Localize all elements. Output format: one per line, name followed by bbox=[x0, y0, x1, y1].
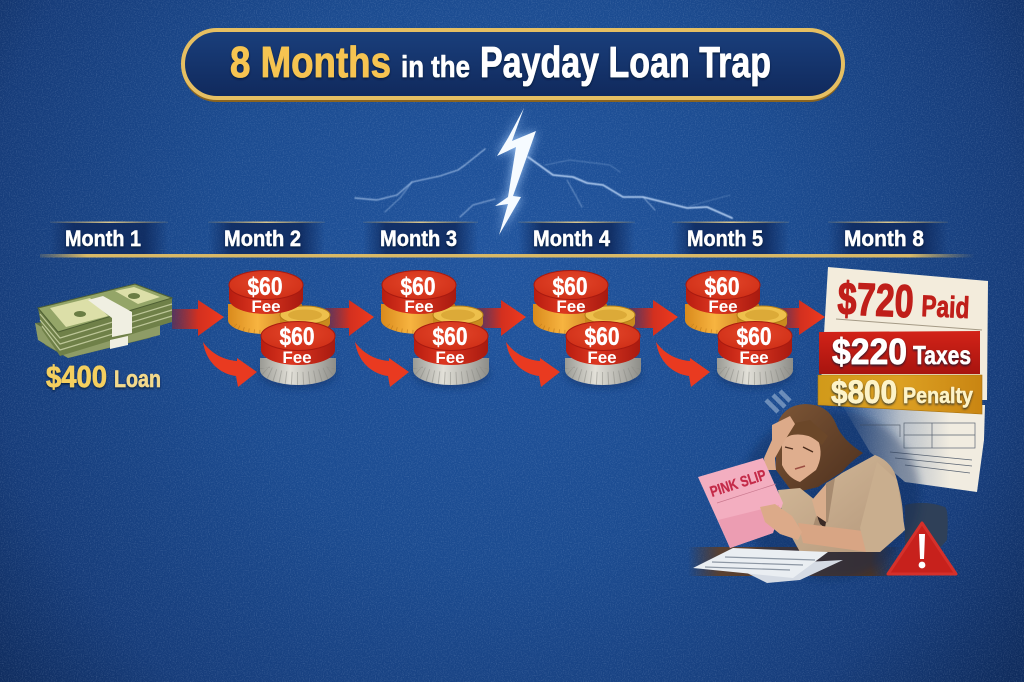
month label: Month 3: Month 3 bbox=[380, 226, 457, 251]
papers on desk bbox=[693, 548, 843, 583]
fee coins: month 5: Fee bbox=[708, 297, 738, 316]
tax form document bbox=[842, 405, 985, 492]
fee coins: month 3: $60 bbox=[432, 323, 468, 351]
fee coins: month 3 bbox=[381, 270, 489, 388]
curved arrow 4 bbox=[656, 342, 710, 387]
face bbox=[782, 434, 821, 482]
raised hand bbox=[764, 416, 795, 470]
hair bbox=[776, 404, 863, 493]
month label: Month 2 bbox=[208, 222, 325, 254]
fee coins: month 3: $60 bbox=[400, 273, 436, 301]
month label: Month 4 bbox=[518, 222, 635, 254]
receipt: $720 Paid: $720 bbox=[837, 272, 915, 327]
fee coins: month 4: $60 bbox=[584, 323, 620, 351]
month label: Month 4: Month 4 bbox=[533, 226, 611, 251]
band: $800 Penalty bbox=[818, 374, 982, 414]
month label: Month 8: Month 8 bbox=[844, 226, 924, 251]
month label: Month 3 bbox=[363, 222, 478, 254]
pink slip bbox=[698, 458, 783, 548]
fee coins: month 2: Fee bbox=[251, 297, 281, 316]
fee coins: month 3: Fee bbox=[435, 348, 465, 367]
band: $220 Taxes bbox=[819, 331, 980, 374]
arrow: month 3 to month 4 bbox=[477, 300, 526, 336]
fee coins: month 5: $60 bbox=[704, 273, 740, 301]
desk bbox=[688, 547, 903, 576]
receipt: $720 Paid: Paid bbox=[921, 290, 970, 325]
fee coins: month 2: Fee bbox=[282, 348, 312, 367]
title: 8 Months: 8 Months bbox=[230, 38, 391, 87]
month label: Month 1 bbox=[50, 222, 168, 254]
month label: Month 2: Month 2 bbox=[224, 226, 301, 251]
fee coins: month 5: Fee bbox=[739, 348, 769, 367]
icon: cash stack bbox=[35, 284, 172, 358]
forearm bbox=[798, 523, 867, 552]
curved arrow 3 bbox=[506, 342, 560, 387]
receipt: $720 Paid bbox=[820, 267, 988, 400]
fee coins: month 4: $60 bbox=[552, 273, 588, 301]
title banner bbox=[182, 30, 844, 102]
band: $800 Penalty: $800 bbox=[831, 374, 897, 410]
fee coins: month 4 bbox=[533, 270, 641, 388]
text: $400 Loan: $400 bbox=[46, 359, 107, 394]
timeline rule bbox=[40, 254, 975, 258]
pink slip: PINK SLIP bbox=[708, 467, 768, 501]
holding hand bbox=[760, 504, 802, 540]
lightning bolt bbox=[355, 108, 732, 235]
band: $800 Penalty: Penalty bbox=[903, 383, 974, 408]
curved arrow 2 bbox=[355, 342, 409, 387]
chair bbox=[905, 503, 948, 550]
text: $400 Loan: Loan bbox=[114, 366, 161, 393]
fee coins: month 2: $60 bbox=[248, 273, 282, 301]
title: in the: in the bbox=[401, 49, 470, 84]
arrow: month 2 to month 3 bbox=[325, 300, 374, 336]
fee coins: month 4: Fee bbox=[587, 348, 617, 367]
band: $220 Taxes: $220 bbox=[832, 331, 907, 372]
month label: Month 8 bbox=[828, 222, 948, 254]
arrow: month 1 to month 2 bbox=[172, 300, 224, 336]
fee coins: month 5 bbox=[685, 270, 793, 388]
month label: Month 5 bbox=[672, 222, 789, 254]
motion lines bbox=[766, 391, 790, 412]
arrow: month 5 to month 8 bbox=[776, 300, 825, 335]
fee coins: month 2 bbox=[228, 270, 336, 388]
text: $400 Loan bbox=[46, 359, 161, 394]
fee coins: month 5: $60 bbox=[736, 323, 772, 351]
illustration: stressed woman bbox=[698, 391, 920, 580]
arrow: month 4 to month 5 bbox=[629, 300, 678, 336]
month label: Month 1: Month 1 bbox=[65, 226, 141, 251]
fee coins: month 4: Fee bbox=[556, 297, 586, 316]
sweater bbox=[778, 455, 903, 552]
curved arrow 1 bbox=[203, 342, 257, 387]
band: $220 Taxes: Taxes bbox=[913, 340, 971, 370]
fee coins: month 2: $60 bbox=[280, 323, 314, 351]
title: Payday Loan Trap: Payday Loan Trap bbox=[480, 38, 771, 87]
icon: warning triangle bbox=[888, 523, 956, 574]
fee coins: month 3: Fee bbox=[404, 297, 434, 316]
month label: Month 5: Month 5 bbox=[687, 226, 763, 251]
